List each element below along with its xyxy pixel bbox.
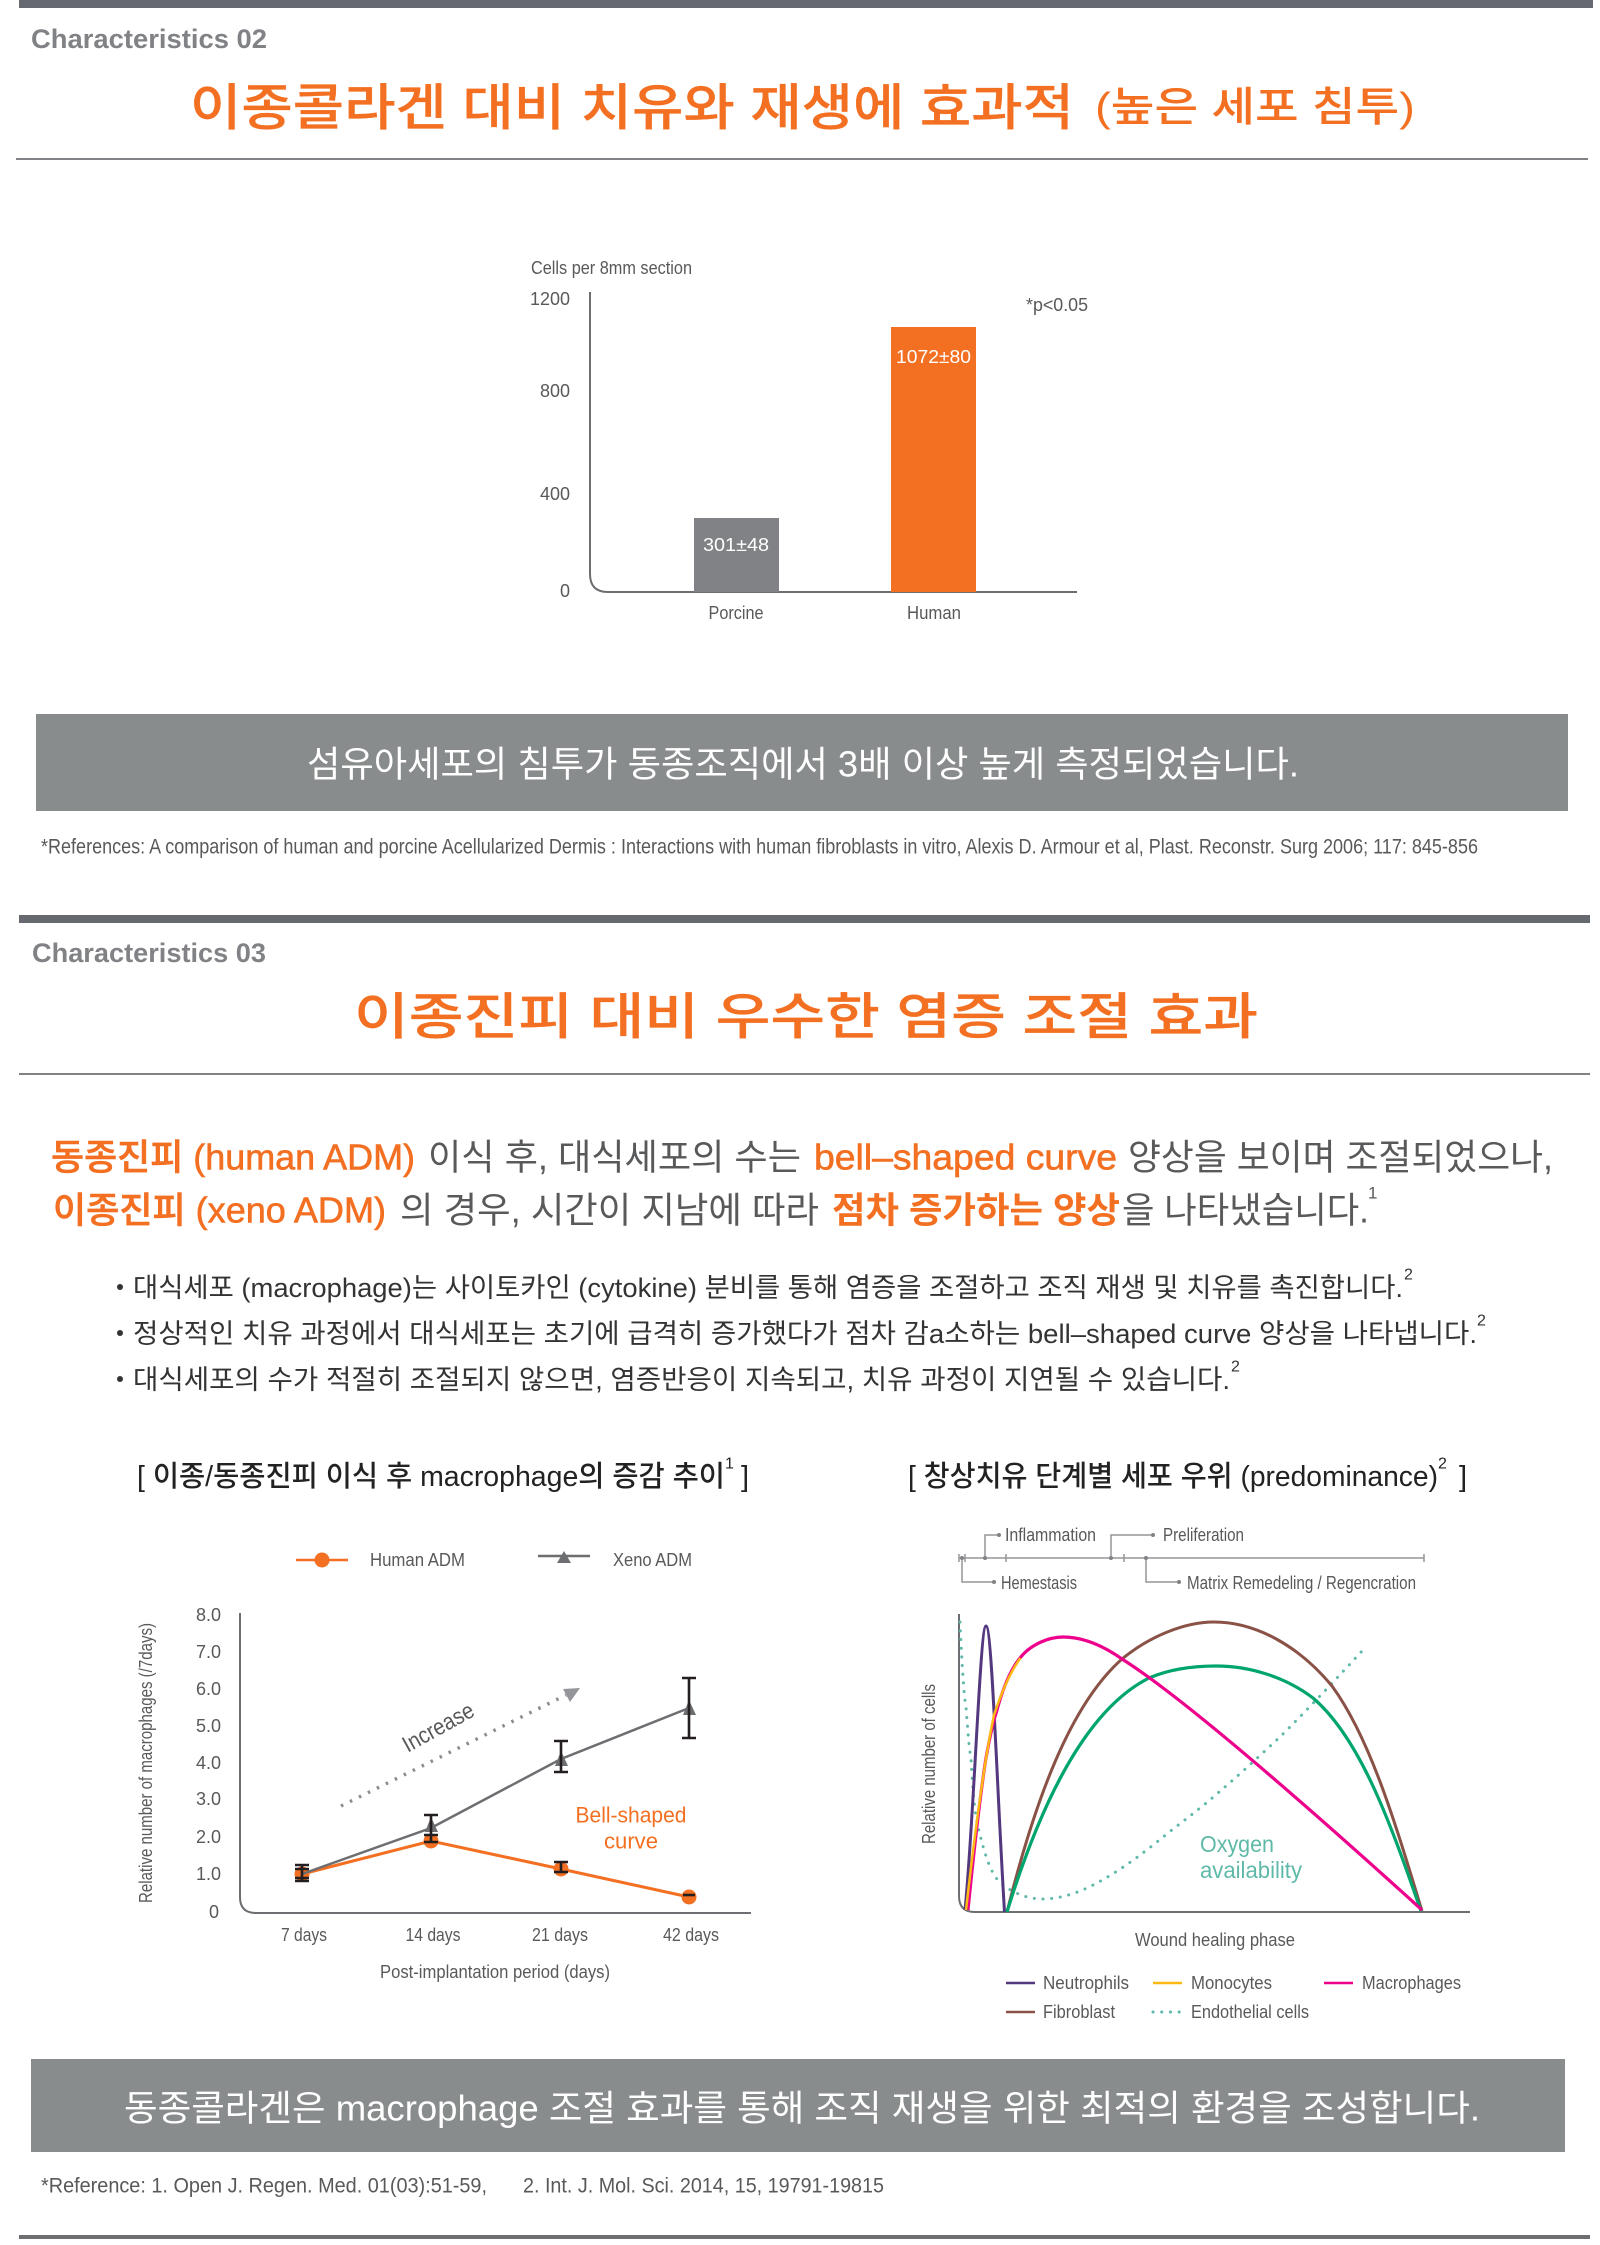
category labels: [708, 603, 961, 623]
bullet list: 2: [1231, 1358, 1240, 1376]
intro paragraph: 을 나타냈습니다.: [1122, 1190, 1369, 1230]
bullet list: 대식세포 (macrophage)는 사이토카인 (cytokine) 분비를 통해 염증을 조절하고 조직 재생 및 치유를 촉진합니다.: [133, 1273, 1403, 1303]
reference: section 03: 2. Int. J. Mol. Sci. 2014, 15, 19791-19815: [523, 2174, 884, 2198]
curve: macrophages: [968, 1637, 1422, 1910]
legend: Neutrophils: [1043, 1973, 1129, 1993]
bullet list: 정상적인 치유 과정에서 대식세포는 초기에 급격히 증가했다가 점차 감a소하는 bell–shaped curve 양상을 나타냅니다.: [133, 1319, 1477, 1349]
title: section 02: (높은 세포 침투): [1095, 84, 1415, 130]
reference: section 03: [41, 2174, 884, 2198]
series: Xeno ADM: [302, 1700, 696, 1874]
y ticks: 7.0: [196, 1642, 221, 1662]
y axis ticks: [530, 289, 570, 601]
intro paragraph: 이식 후, 대식세포의 수는: [428, 1136, 801, 1178]
curve: endothelial cells: [960, 1622, 1363, 1899]
series: Human ADM: [294, 1834, 696, 1904]
heading: right chart: [ 창상치유 단계별 세포 우위 (predominance): [908, 1460, 1438, 1493]
y ticks: 5.0: [196, 1716, 221, 1736]
phase timeline: Hemestasis: [1001, 1573, 1077, 1593]
x ticks: 42 days: [663, 1925, 719, 1945]
y axis ticks: 800: [540, 381, 570, 401]
wound healing chart: [919, 1525, 1470, 2022]
callout: fibroblast infiltration: [36, 714, 1568, 811]
x ticks: 14 days: [406, 1925, 460, 1945]
y ticks: 6.0: [196, 1679, 221, 1699]
y ticks: 8.0: [196, 1605, 221, 1625]
annotation: bell-shaped curve: curve: [604, 1828, 658, 1854]
bullet list: 2: [1404, 1266, 1413, 1284]
y axis ticks: 1200: [530, 289, 570, 309]
label: Characteristics 03: Characteristics 03: [32, 938, 266, 968]
intro paragraph: 동종진피 (human ADM): [51, 1136, 415, 1178]
annotation: bell-shaped curve: Bell-shaped: [576, 1802, 686, 1828]
axes: [590, 292, 1077, 592]
axis label: Cells per 8mm section: [531, 258, 692, 278]
heading: left chart: 1: [725, 1456, 734, 1472]
heading: right chart: ]: [1459, 1461, 1467, 1493]
legend: Human ADM: [370, 1550, 465, 1570]
significance note: *p<0.05: [1026, 295, 1088, 315]
reference: section 03: *Reference: 1. Open J. Regen. Med. 01(03):51-59,: [41, 2174, 487, 2198]
y ticks: 3.0: [196, 1789, 221, 1809]
heading: right chart: 2: [1438, 1456, 1447, 1472]
line chart: macrophage trend: [136, 1550, 751, 1982]
x axis label: Wound healing phase: [1135, 1930, 1295, 1950]
y ticks: 2.0: [196, 1827, 221, 1847]
intro paragraph: 의 경우, 시간이 지남에 따라: [400, 1190, 819, 1230]
x ticks: 7 days: [281, 1925, 327, 1945]
intro paragraph: 1: [1368, 1184, 1377, 1202]
bar: porcine: [694, 518, 779, 592]
bullet list: 2: [1477, 1312, 1486, 1330]
y ticks: 1.0: [196, 1864, 221, 1884]
section: Characteristics 02 header: [16, 0, 1593, 160]
phase timeline: [959, 1525, 1424, 1593]
intro paragraph: [51, 1136, 1553, 1230]
y ticks: [196, 1605, 221, 1922]
legend: [296, 1550, 692, 1570]
curve: endothelial solid green: [1007, 1666, 1421, 1912]
intro paragraph: 양상을 보이며 조절되었으나,: [1128, 1136, 1553, 1178]
intro paragraph: bell–shaped curve: [814, 1136, 1117, 1178]
phase timeline: Preliferation: [1163, 1525, 1244, 1545]
intro paragraph: 이종진피 (xeno ADM): [53, 1190, 386, 1230]
callout: fibroblast infiltration: 섬유아세포의 침투가 동종조직에서 3배 이상 높게 측정되었습니다.: [307, 744, 1299, 784]
bullet list: [117, 1266, 1486, 1395]
y ticks: 0: [209, 1902, 219, 1922]
x axis label: Post-implantation period (days): [380, 1962, 610, 1982]
y axis label: Relative number of cells: [919, 1684, 939, 1844]
title: section 02: 이종콜라겐 대비 치유와 재생에 효과적: [190, 80, 1074, 136]
bar: human: 1072±80: [896, 347, 971, 367]
x ticks: [281, 1925, 719, 1945]
heading: left chart: ]: [741, 1461, 749, 1493]
bar: porcine: 301±48: [703, 535, 769, 555]
annotation: oxygen availability: [1200, 1831, 1302, 1883]
increase arrow: Increase: [398, 1697, 478, 1757]
callout: macrophage regulation: 동종콜라겐은 macrophage 조절 효과를 통해 조직 재생을 위한 최적의 환경을 조성합니다.: [124, 2088, 1480, 2128]
legend: Xeno ADM: [613, 1550, 692, 1570]
axes: [959, 1614, 1470, 1912]
curve: neutrophils: [965, 1626, 1004, 1912]
annotation: oxygen availability: Oxygen: [1200, 1831, 1274, 1857]
axes: [240, 1613, 751, 1913]
section: Characteristics 03 header: [19, 915, 1590, 1075]
curve: monocytes: [966, 1658, 1020, 1910]
error bars: [295, 1678, 696, 1895]
heading: left chart: [ 이종/동종진피 이식 후 macrophage의 증감 추이: [137, 1460, 725, 1493]
y axis ticks: 400: [540, 484, 570, 504]
legend: Macrophages: [1362, 1973, 1461, 1993]
y axis ticks: 0: [560, 581, 570, 601]
bar chart: cells per 8mm section: [530, 258, 1088, 623]
legend: [1006, 1973, 1461, 2022]
x ticks: 21 days: [532, 1925, 588, 1945]
y axis label: Relative number of macrophages (/7days): [136, 1623, 156, 1903]
legend: Endothelial cells: [1191, 2002, 1309, 2022]
title: section 02: [190, 80, 1415, 136]
annotation: oxygen availability: availability: [1200, 1857, 1302, 1883]
y ticks: 4.0: [196, 1753, 221, 1773]
legend: Monocytes: [1191, 1973, 1272, 1993]
label: Characteristics 02: Characteristics 02: [31, 24, 267, 54]
legend: Fibroblast: [1043, 2002, 1115, 2022]
category labels: Porcine: [708, 603, 764, 623]
curve: fibroblast: [1007, 1622, 1422, 1912]
increase arrow: [341, 1688, 580, 1806]
intro paragraph: 점차 증가하는 양상: [832, 1190, 1120, 1230]
phase timeline: Matrix Remedeling / Regencration: [1187, 1573, 1416, 1593]
callout: macrophage regulation: [31, 2059, 1565, 2152]
phase timeline: Inflammation: [1005, 1525, 1096, 1545]
annotation: bell-shaped curve: [576, 1802, 686, 1854]
bar: human: [891, 327, 976, 592]
title: section 03: 이종진피 대비 우수한 염증 조절 효과: [354, 989, 1258, 1045]
category labels: Human: [907, 603, 961, 623]
bullet list: 대식세포의 수가 적절히 조절되지 않으면, 염증반응이 지속되고, 치유 과정이 지연될 수 있습니다.: [133, 1365, 1230, 1395]
